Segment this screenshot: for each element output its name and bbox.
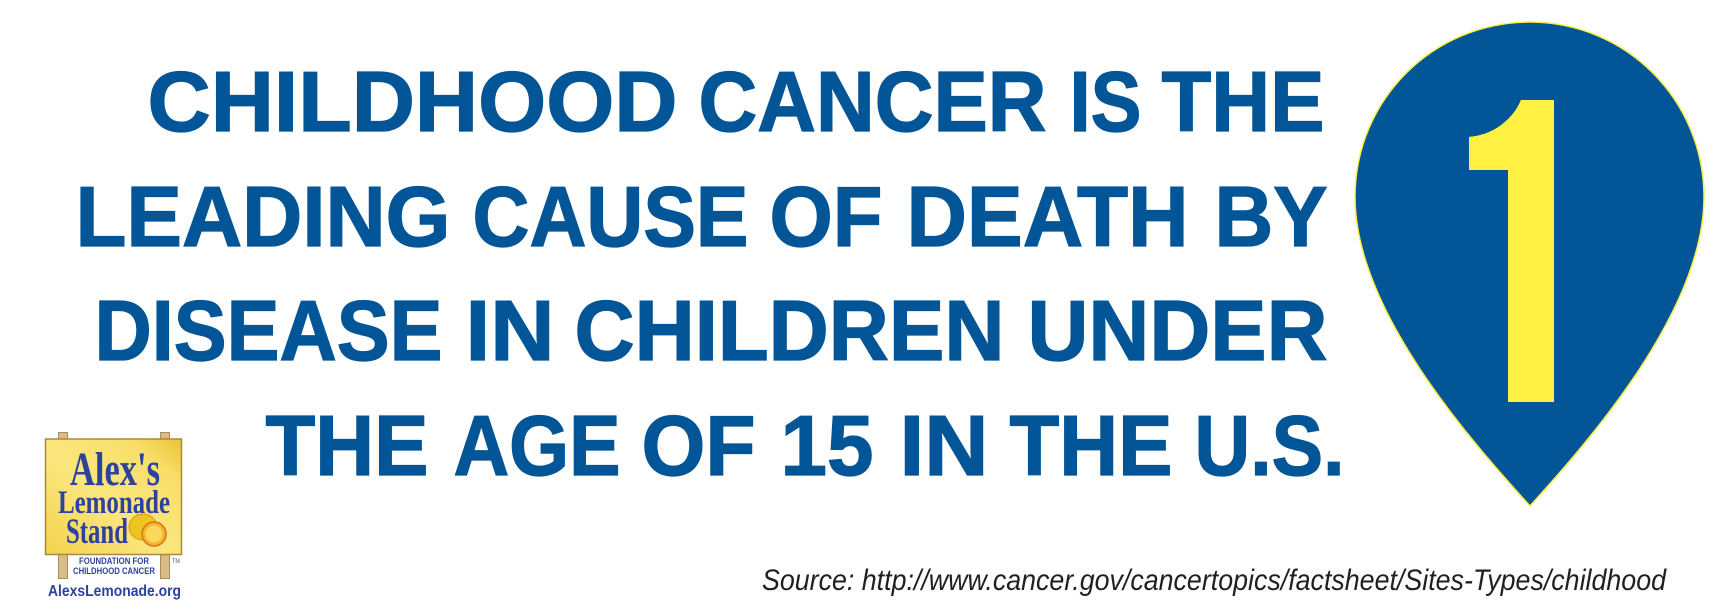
foundation tagline: FOUNDATION FOR (79, 556, 149, 566)
sign board (46, 439, 182, 554)
logo wordmark: Alex's (70, 443, 160, 496)
foundation tagline (73, 556, 155, 576)
sign posts (58, 432, 170, 578)
title line 1 (148, 55, 1324, 150)
icon: map pin with number one (1355, 4, 1704, 506)
lemon illustration (129, 514, 166, 546)
title line 2: BY (1214, 170, 1328, 265)
logo: Alex's Lemonade Stand (46, 432, 182, 600)
title line 3: DISEASE (94, 284, 442, 379)
title line 3: UNDER (1028, 284, 1328, 379)
numeral 1 (1469, 100, 1554, 402)
title line 1: THE (1162, 55, 1324, 150)
title line 1: CHILDHOOD (148, 55, 678, 150)
numeral 1: 1 (1431, 4, 1619, 498)
title line 4: AGE (454, 399, 620, 494)
title line 4: U.S. (1194, 399, 1344, 494)
logo wordmark: Stand (66, 511, 128, 551)
title line 4 (266, 399, 1344, 494)
logo wordmark: Lemonade (58, 485, 170, 521)
pin shape (1355, 22, 1704, 506)
title line 2: DEATH (906, 170, 1188, 265)
title: leading cause of death statement (76, 55, 1344, 494)
title line 1: IS (1070, 55, 1142, 150)
foundation tagline: CHILDHOOD CANCER (73, 566, 155, 576)
title line 2 (76, 170, 1328, 265)
trademark: TM (172, 559, 180, 565)
title line 4: THE (1010, 399, 1172, 494)
website: AlexsLemonade.org (48, 583, 181, 600)
title line 4: THE (266, 399, 428, 494)
title line 1: CANCER (698, 55, 1046, 150)
title line 4: IN (900, 399, 988, 494)
logo wordmark (58, 443, 170, 551)
title line 4: OF (642, 399, 756, 494)
title line 2: CAUSE (472, 170, 748, 265)
title line 3 (94, 284, 1328, 379)
title line 3: IN (466, 284, 554, 379)
title line 2: OF (770, 170, 882, 265)
title line 2: LEADING (76, 170, 450, 265)
title line 4: 15 (780, 399, 874, 494)
title line 3: CHILDREN (574, 284, 1004, 379)
